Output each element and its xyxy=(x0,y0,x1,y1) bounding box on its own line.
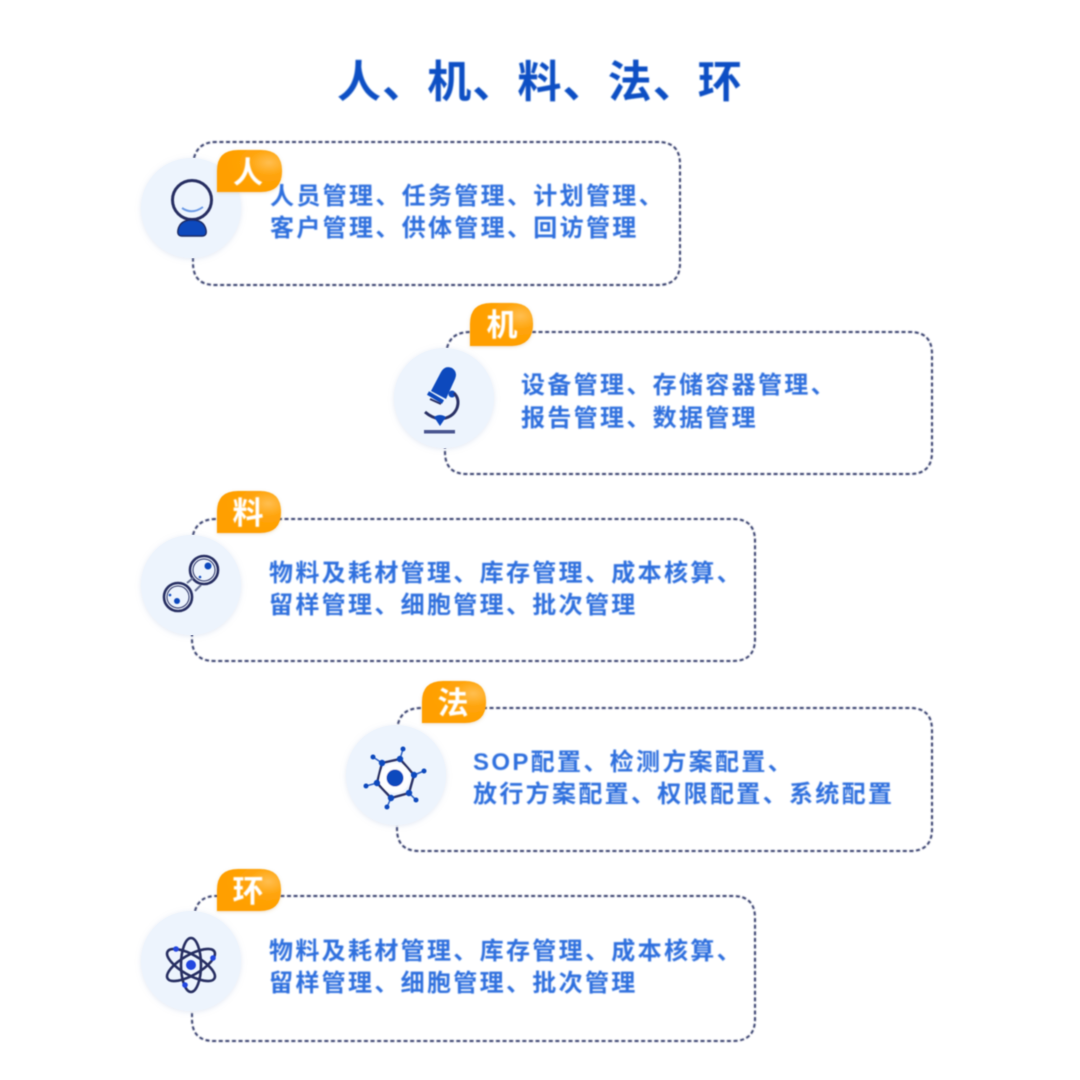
icon circle xyxy=(394,348,494,448)
panel: 法 xyxy=(346,681,932,851)
badge xyxy=(217,491,281,533)
icon circle xyxy=(346,725,446,825)
icon circle xyxy=(141,911,241,1011)
description: 报告管理、数据管理 xyxy=(521,405,758,432)
icon: person xyxy=(172,180,212,236)
icon circle xyxy=(141,158,241,258)
badge label: 料 xyxy=(232,496,264,531)
panel: 料 xyxy=(141,491,755,661)
badge xyxy=(470,303,533,346)
description: 物料及耗材管理、库存管理、成本核算、 xyxy=(269,938,743,965)
dashed frame xyxy=(397,708,932,851)
badge label: 机 xyxy=(486,308,518,343)
badge xyxy=(217,150,282,192)
icon: microscope xyxy=(424,367,458,434)
description: 设备管理、存储容器管理、 xyxy=(521,372,837,399)
title: 人、机、料、法、环 xyxy=(337,58,743,107)
description: 客户管理、供体管理、回访管理 xyxy=(270,214,639,242)
description: SOP配置、检测方案配置、 xyxy=(473,748,794,776)
description: 放行方案配置、权限配置、系统配置 xyxy=(473,780,894,808)
icon circle xyxy=(141,535,241,635)
badge xyxy=(422,681,486,723)
panel: 环 xyxy=(141,869,755,1041)
badge label: 人 xyxy=(233,157,263,190)
dashed frame xyxy=(445,332,932,474)
dashed frame xyxy=(192,519,755,661)
badge xyxy=(217,869,281,911)
badge label: 环 xyxy=(232,874,264,909)
description: 人员管理、任务管理、计划管理、 xyxy=(270,183,665,210)
description: 留样管理、细胞管理、批次管理 xyxy=(269,970,638,997)
dashed frame xyxy=(192,896,755,1041)
icon: cells xyxy=(164,556,218,611)
icon: atom xyxy=(163,938,219,992)
dashed frame xyxy=(193,142,680,285)
panel: 机 xyxy=(394,303,932,474)
icon: molecule xyxy=(364,746,426,810)
description: 留样管理、细胞管理、批次管理 xyxy=(269,592,638,619)
badge label: 法 xyxy=(438,686,468,721)
panel: 人 xyxy=(141,142,680,285)
description: 物料及耗材管理、库存管理、成本核算、 xyxy=(269,560,743,587)
